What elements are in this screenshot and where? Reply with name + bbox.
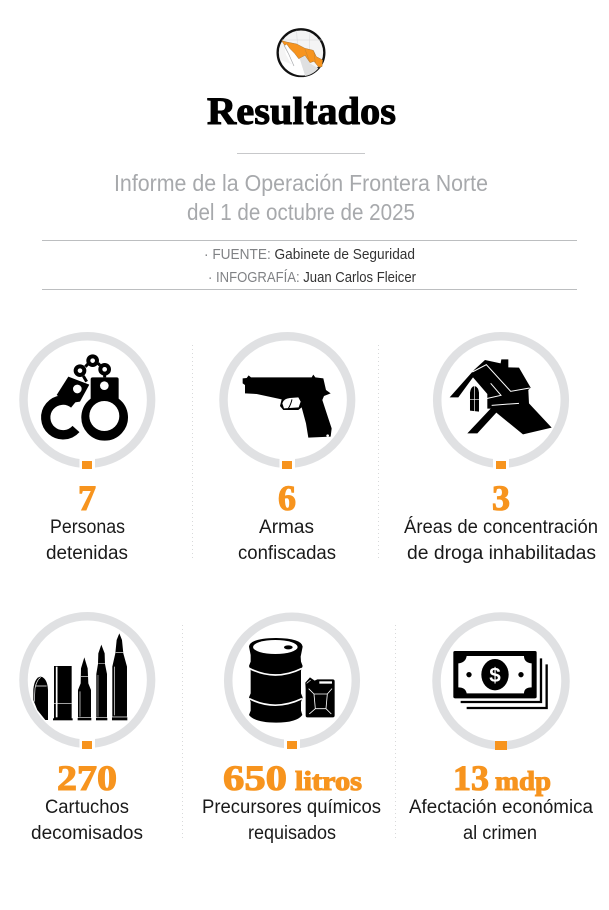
label: Armas — [259, 517, 314, 538]
number 13 mdp — [453, 758, 551, 798]
icon: pistol — [243, 375, 332, 438]
credits block — [42, 240, 577, 290]
label: Afectación económica — [409, 797, 593, 818]
number 13 mdp: 13 — [453, 758, 489, 798]
label — [202, 797, 381, 844]
number 650 litros: 650 — [223, 758, 287, 798]
number 6: 6 — [278, 478, 296, 518]
ring 5 — [228, 617, 356, 752]
label: Personas — [50, 517, 125, 538]
ring 2 — [223, 336, 351, 472]
number 650 litros: litros — [295, 766, 362, 796]
panel: personas detenidas — [24, 336, 151, 564]
panel: precursores químicos — [202, 617, 381, 844]
number 7: 7 — [78, 478, 96, 518]
panel: cartuchos decomisados — [24, 616, 151, 844]
icon: stack of banknotes — [453, 651, 547, 708]
subtitle: Informe de la Operación Frontera Norte — [114, 170, 488, 196]
label: Áreas de concentración — [404, 517, 598, 538]
icon: bullets — [33, 633, 127, 720]
label — [238, 517, 336, 564]
label: confiscadas — [238, 543, 336, 564]
label: Precursores químicos — [202, 797, 381, 818]
ring 3 — [437, 336, 565, 472]
label: requisados — [248, 823, 336, 844]
label — [404, 517, 598, 564]
label: Cartuchos — [45, 797, 129, 818]
icon: broken house — [450, 359, 552, 434]
number 650 litros — [223, 758, 362, 798]
title rule — [237, 152, 365, 154]
number 270: 270 — [57, 758, 117, 798]
credits block: · FUENTE: Gabinete de Seguridad — [204, 246, 415, 263]
subtitle — [114, 170, 488, 225]
label: detenidas — [46, 543, 128, 564]
panel: áreas de concentración — [404, 336, 598, 564]
subtitle: del 1 de octubre de 2025 — [187, 199, 415, 225]
number 13 mdp: mdp — [495, 766, 551, 796]
icon: map of Mexico — [278, 29, 324, 76]
label: decomisados — [31, 823, 143, 844]
panel: armas confiscadas — [223, 336, 351, 564]
label — [46, 517, 128, 564]
ring 6 — [436, 616, 566, 750]
title: Resultados — [207, 90, 396, 133]
icon: stack of banknotes: $ — [489, 664, 501, 687]
credits block: · INFOGRAFÍA: Juan Carlos Fleicer — [208, 269, 416, 286]
icon: oil barrel and jerry can — [249, 638, 335, 723]
label — [31, 797, 143, 844]
panel: afectación económica — [409, 616, 593, 844]
label — [409, 797, 593, 844]
ring 4 — [24, 616, 151, 752]
icon: handcuffs — [46, 356, 129, 441]
number 3: 3 — [492, 478, 510, 518]
label: de droga inhabilitadas — [407, 543, 596, 564]
label: al crimen — [463, 823, 537, 844]
ring 1 — [24, 336, 151, 472]
